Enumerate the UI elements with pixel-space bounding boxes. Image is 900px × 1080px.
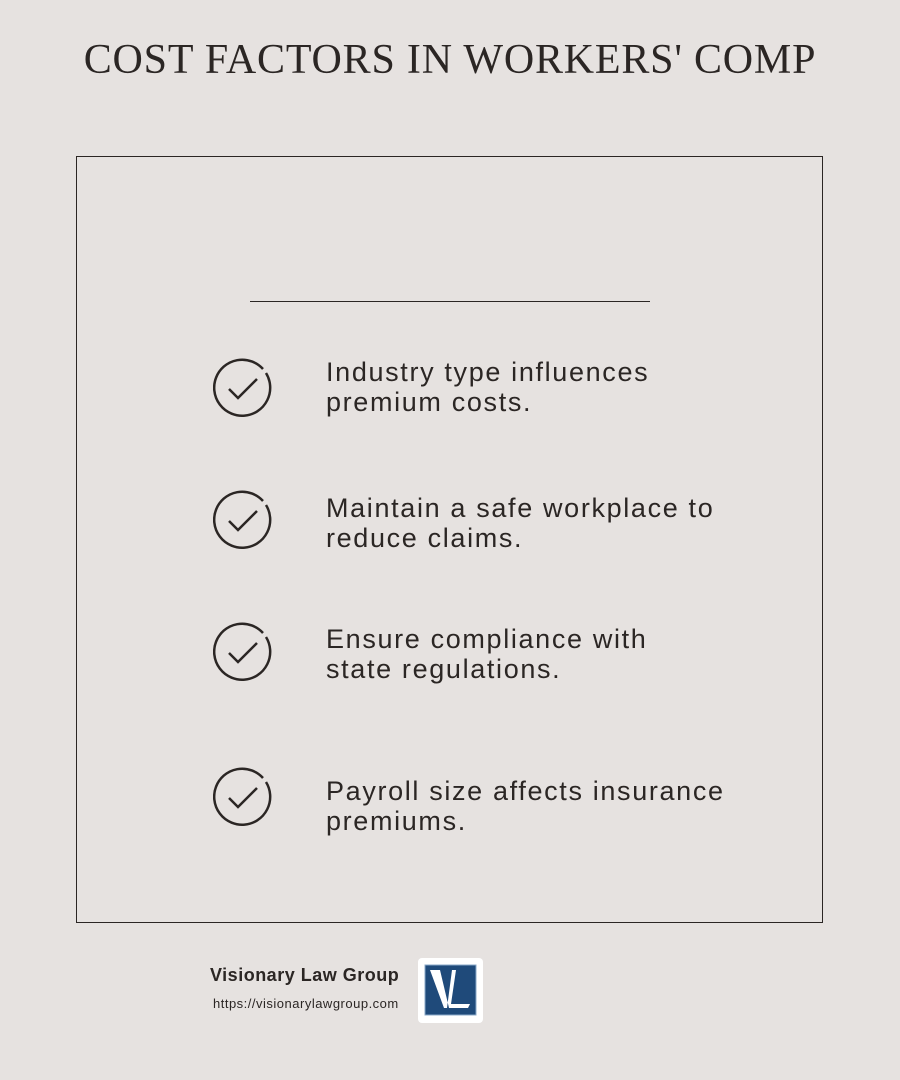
text 2: reduce claims. — [326, 523, 523, 553]
icon: check 3 — [213, 622, 272, 681]
footer brand name: Visionary Law Group — [210, 965, 399, 985]
text 4: Payroll size affects insurance — [326, 776, 725, 806]
text 1 — [326, 357, 649, 417]
text 1: Industry type influences — [326, 357, 649, 387]
panel: factors — [76, 156, 823, 923]
icon: check 1 — [213, 358, 272, 417]
footer url: https://visionarylawgroup.com — [213, 996, 399, 1011]
logo — [418, 958, 483, 1023]
text 3: Ensure compliance with — [326, 624, 647, 654]
divider line — [250, 301, 650, 302]
text 3 — [326, 624, 647, 684]
icon: check 2 — [213, 490, 272, 549]
text 2 — [326, 493, 714, 553]
text 4: premiums. — [326, 806, 467, 836]
icon: check 4 — [213, 768, 272, 826]
text 3: state regulations. — [326, 654, 561, 684]
title: COST FACTORS IN WORKERS' COMP — [84, 37, 816, 83]
text 2: Maintain a safe workplace to — [326, 493, 714, 523]
text 1: premium costs. — [326, 387, 532, 417]
text 4 — [326, 776, 725, 836]
